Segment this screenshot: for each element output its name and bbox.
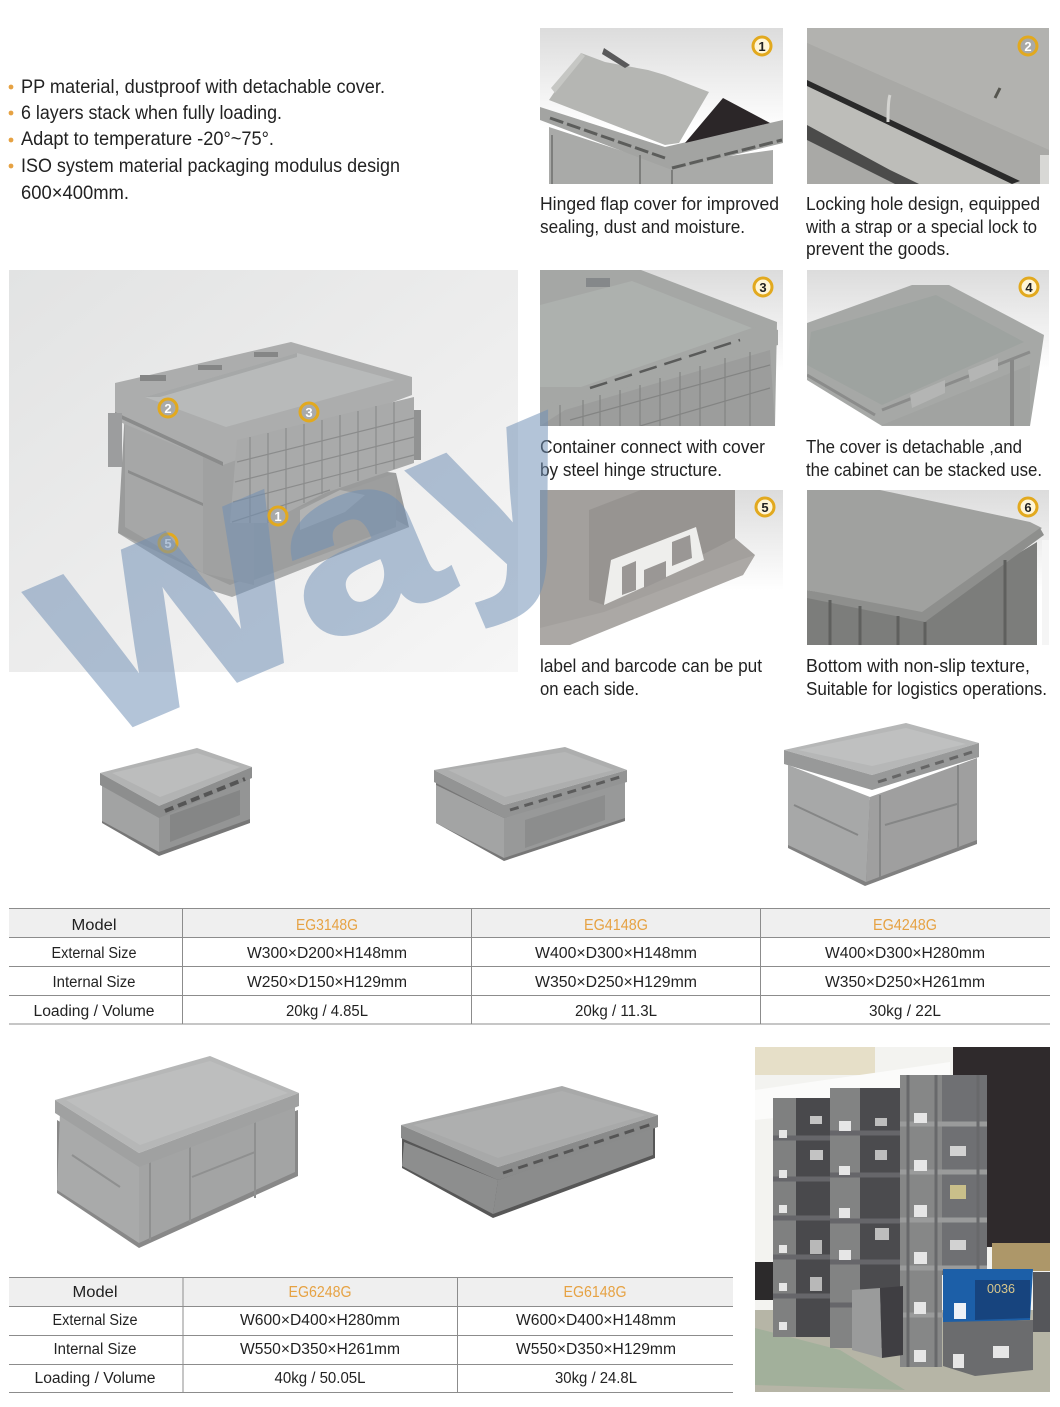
feature bullet list: ISO system material packaging modulus design [21,156,400,177]
feature bullet list: PP material, dustproof with detachable cover. [21,77,385,98]
callout badge: 3 [759,280,767,295]
blue crate labelled 0036 [943,1269,1033,1323]
feature bullet list: Adapt to temperature -20°~75°. [21,129,274,150]
table: large containers: 30kg / 24.8L [555,1370,637,1387]
callout badge: 6 [1024,500,1032,515]
caption: detail 1: Hinged flap cover for improved [540,194,779,214]
callout badge [753,37,771,55]
caption: detail 3 [540,437,765,480]
table: large containers: External Size [52,1312,138,1329]
panel: detail 3 steel hinge [540,270,783,426]
table: small containers: External Size [52,945,136,962]
stack of crates: right column [900,1075,987,1367]
table: large containers: W550×D350×H129mm [516,1341,676,1358]
icon: main crate with open flap [108,342,421,597]
loose crate [852,1286,903,1358]
table: small containers: W300×D200×H148mm [247,945,407,962]
product photo: EG4248G crate [784,723,979,886]
table: small containers: Loading / Volume [34,1003,154,1020]
callout badge 1: 1 [274,509,282,524]
table: small containers: EG4248G [873,917,937,934]
caption: detail 2: Locking hole design, equipped [806,194,1040,214]
panel: detail 1 hinged flap [540,28,783,184]
caption: detail 1: sealing, dust and moisture. [540,217,745,237]
table: small containers: EG4148G [584,917,648,934]
caption: detail 3: by steel hinge structure. [540,460,722,480]
table: large containers: W600×D400×H148mm [516,1312,676,1329]
table: small containers: 20kg / 11.3L [575,1003,657,1020]
table: small containers: W350×D250×H129mm [535,974,697,991]
table: small containers: Internal Size [52,974,136,991]
table: large containers: Internal Size [54,1341,136,1358]
caption: detail 6 [806,656,1047,699]
caption: detail 2 [805,194,1040,259]
table: small containers: W400×D300×H280mm [825,945,985,962]
caption: detail 1 [540,194,779,237]
table: small containers: W350×D250×H261mm [825,974,985,991]
caption: detail 4: the cabinet can be stacked use. [806,460,1042,480]
feature bullet list: 600×400mm. [21,183,129,204]
caption: detail 4: The cover is detachable ,and [806,437,1022,457]
table: large containers: W550×D350×H261mm [240,1341,400,1358]
blue crate labelled 0036: 0036 [987,1281,1015,1296]
table: large containers: 40kg / 50.05L [274,1370,366,1387]
product photo: EG3148G crate [100,748,252,856]
callout badge: 4 [1025,280,1033,295]
table: large containers: EG6148G [564,1284,626,1301]
caption: detail 4 [806,437,1042,480]
watermark: Way: Way [6,332,615,790]
table: small containers: 20kg / 4.85L [286,1003,368,1020]
table: small containers: W250×D150×H129mm [247,974,407,991]
callout badge 5 [159,534,177,552]
callout badge [1019,498,1037,516]
table: small containers: W400×D300×H148mm [535,945,697,962]
stack of crates: middle column [830,1088,900,1348]
product photo: EG6248G crate [55,1056,299,1248]
photo: stacked crates at loading dock [755,1047,1050,1392]
table: large containers: EG6248G [288,1284,352,1301]
table: small containers [9,908,1050,1024]
feature bullet list: 6 layers stack when fully loading. [21,103,282,124]
callout badge [756,498,774,516]
table: small containers: 30kg / 22L [869,1003,941,1020]
callout badge: 5 [761,500,769,515]
callout badge 2: 2 [164,401,172,416]
panel: detail 2 locking hole [807,28,1049,184]
callout badge [754,278,772,296]
caption: detail 6: Bottom with non-slip texture, [806,656,1030,676]
caption: detail 3: Container connect with cover [540,437,765,457]
callout badge 5: 5 [164,536,172,551]
table: large containers: Loading / Volume [34,1370,156,1387]
callout badge 2 [159,399,177,417]
stack of crates: left column [773,1098,832,1337]
caption: detail 5: on each side. [540,679,639,699]
table: large containers: Model [72,1284,118,1301]
caption: detail 2: with a strap or a special lock to [805,217,1037,237]
callout badge 3 [300,403,318,421]
product photo: EG4148G crate [434,747,627,861]
panel: detail 5 label area [540,490,783,645]
product photo: EG6148G crate [401,1086,658,1218]
caption: detail 5: label and barcode can be put [540,656,762,676]
callout badge 1 [269,507,287,525]
callout badge: 1 [758,39,766,54]
panel: main product photo with numbered callouts [9,270,518,672]
table: small containers: EG3148G [296,917,358,934]
table: small containers: Model [72,917,116,934]
callout badge [1020,278,1038,296]
panel: detail 4 detachable cover [807,270,1049,426]
table: large containers [9,1277,733,1392]
caption: detail 6: Suitable for logistics operations. [806,679,1047,699]
grey crate below blue crate [943,1320,1033,1376]
callout badge 3: 3 [305,405,313,420]
callout badge [1019,37,1037,55]
caption: detail 2: prevent the goods. [806,239,950,259]
callout badge: 2 [1024,39,1032,54]
panel: detail 6 non-slip bottom [807,490,1049,645]
feature bullet list [9,77,400,204]
caption: detail 5 [540,656,762,699]
table: large containers: W600×D400×H280mm [240,1312,400,1329]
